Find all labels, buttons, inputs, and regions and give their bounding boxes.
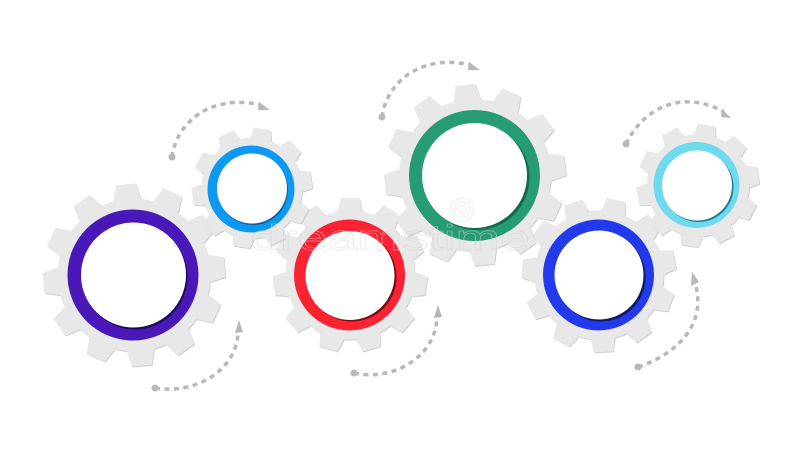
arrow: under purple gear [152, 320, 243, 392]
gear: sky blue [182, 118, 323, 259]
arrow: over light cyan gear [622, 102, 731, 148]
watermark: dreamstime [250, 217, 530, 258]
watermark [250, 198, 530, 258]
arrow: under red gear [350, 305, 442, 376]
gear: purple [35, 176, 233, 375]
gear: red [272, 198, 429, 353]
gear: green [376, 76, 575, 275]
gear: royal blue [506, 182, 693, 369]
arrow: under royal blue gear [634, 272, 699, 370]
gear: light cyan [629, 117, 768, 255]
arrow: over green gear [378, 62, 480, 120]
arrow: over sky blue gear [168, 102, 270, 160]
